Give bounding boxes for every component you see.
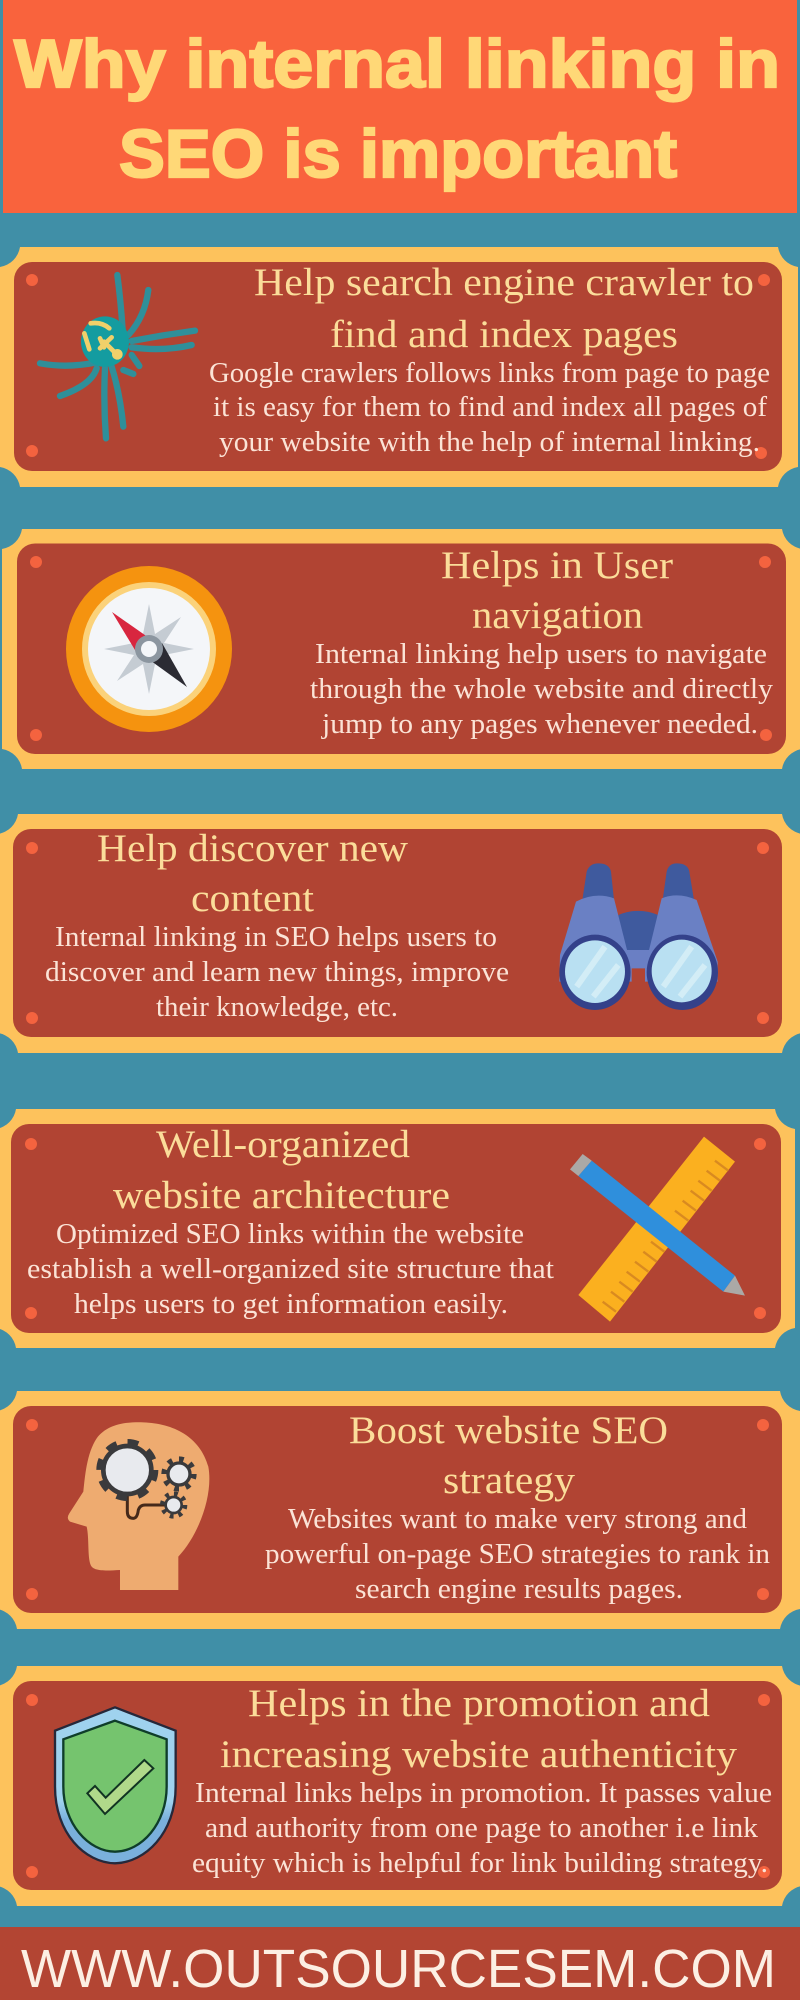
body: authenticity <box>192 1778 772 1879</box>
heading: architecture: Well-organized <box>156 1123 411 1166</box>
heading: discover <box>97 827 408 920</box>
panel: authenticity <box>0 1666 800 1906</box>
heading: navigation: navigation <box>472 594 643 637</box>
body: discover: Internal linking in SEO helps users to <box>55 922 497 953</box>
title text <box>14 26 780 192</box>
icon: shield with check <box>55 1707 176 1863</box>
footer URL: WWW.OUTSOURCESEM.COM <box>21 1939 776 1999</box>
body: crawler: your website with the help of internal linking. <box>219 427 760 458</box>
panel: navigation <box>2 529 800 769</box>
heading: crawler <box>254 261 754 356</box>
icon: ruler and pencil <box>570 1137 745 1322</box>
body: architecture: helps users to get information easily. <box>74 1289 508 1320</box>
heading: navigation <box>441 544 673 637</box>
panel: architecture <box>0 1109 795 1348</box>
body: discover: discover and learn new things, improve <box>45 957 509 988</box>
body: SEO strategy <box>265 1504 770 1605</box>
title banner <box>3 0 797 213</box>
heading: SEO strategy <box>349 1409 668 1502</box>
body: authenticity: Internal links helps in promotion. It passes value <box>195 1778 772 1809</box>
panel: discover <box>0 814 800 1053</box>
panel: SEO strategy <box>0 1391 800 1629</box>
icon: compass <box>66 566 232 732</box>
heading: discover: Help discover new <box>97 827 408 870</box>
body: navigation: Internal linking help users to navigate <box>315 639 767 670</box>
panel: crawler <box>0 247 798 487</box>
icon: binoculars <box>559 863 718 1010</box>
body: SEO strategy: powerful on-page SEO strategies to rank in <box>265 1539 770 1570</box>
body: navigation <box>310 639 773 740</box>
body: navigation: jump to any pages whenever needed. <box>321 709 758 740</box>
body: discover <box>45 922 509 1023</box>
body: crawler: Google crawlers follows links from page to page <box>209 358 770 389</box>
title text: Why internal linking in <box>14 26 780 102</box>
heading: architecture: website architecture <box>113 1174 450 1217</box>
heading: crawler: find and index pages <box>330 313 678 356</box>
heading: SEO strategy: strategy <box>443 1459 576 1502</box>
body: crawler <box>209 358 770 458</box>
body: SEO strategy: search engine results pages. <box>355 1574 683 1605</box>
heading: authenticity: increasing website authenticity <box>220 1733 738 1776</box>
heading: discover: content <box>191 877 314 920</box>
footer band <box>0 1927 800 2000</box>
body: architecture: Optimized SEO links within the website <box>56 1219 524 1250</box>
heading: SEO strategy: Boost website SEO <box>349 1409 668 1452</box>
body: crawler: it is easy for them to find and index all pages of <box>213 392 768 423</box>
body: SEO strategy: Websites want to make very strong and <box>288 1504 747 1535</box>
body: architecture: establish a well-organized site structure that <box>27 1254 554 1285</box>
title text: SEO is important <box>119 116 677 192</box>
body: authenticity: equity which is helpful for link building strategy. <box>192 1848 768 1879</box>
body: navigation: through the whole website and directly <box>310 674 773 705</box>
body: discover: their knowledge, etc. <box>156 992 398 1023</box>
icon: spider <box>40 275 195 438</box>
heading: navigation: Helps in User <box>441 544 673 587</box>
heading: architecture <box>113 1123 450 1217</box>
body: authenticity: and authority from one page to another i.e link <box>205 1813 758 1844</box>
heading: crawler: Help search engine crawler to <box>254 261 754 304</box>
icon: head with gears <box>68 1422 209 1590</box>
heading: authenticity: Helps in the promotion and <box>248 1682 711 1725</box>
body: architecture <box>27 1219 554 1320</box>
heading: authenticity <box>220 1682 738 1776</box>
